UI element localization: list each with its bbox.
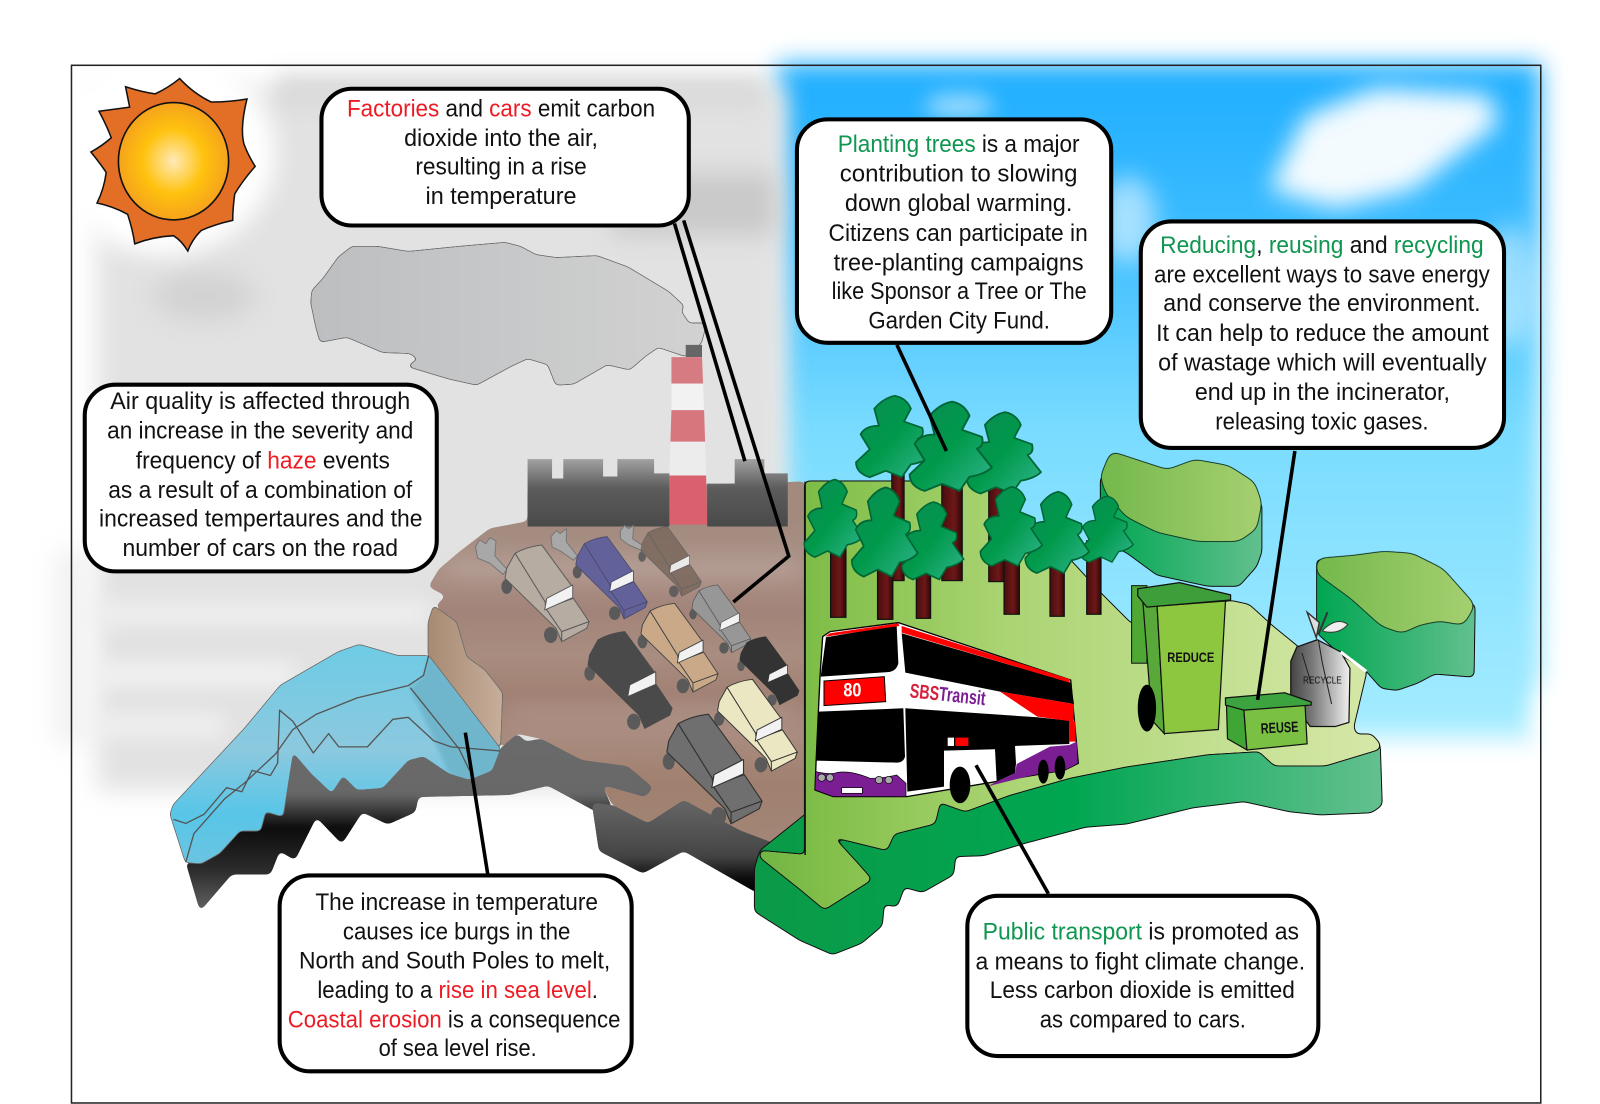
callout: reduce reuse recycle: of wastage which will eventually [1158,349,1487,376]
bush right top [1317,552,1474,633]
callout: sea level rise: The increase in temperature [315,889,598,916]
callout: public transport [967,896,1318,1056]
callout: air quality [85,385,437,571]
icon: sun [91,79,255,251]
reduce label: REDUCE [1167,650,1214,666]
callout: sea level rise: Coastal erosion is a consequence [288,1006,620,1033]
callout: planting trees: tree-planting campaigns [834,249,1084,276]
exhaust smoke puffs [476,525,645,574]
recycle label: RECYCLE [1303,676,1342,687]
callout: sea level rise: causes ice burgs in the [343,919,570,946]
callout: sea level rise [280,875,632,1071]
callout: planting trees: Planting trees is a major [838,131,1080,158]
callout: reduce reuse recycle: It can help to reduce the amount [1156,320,1489,347]
callout: sea level rise: leading to a rise in sea level. [317,977,598,1004]
callout: factories and cars: Factories and cars emit carbon [347,95,655,122]
callout: planting trees: Garden City Fund. [868,308,1050,335]
bush right side [1317,559,1474,690]
dark eroded shoreline right [592,800,805,898]
route number: 80 [843,681,861,702]
callout: planting trees: down global warming. [845,190,1072,217]
icon: recycle bag [1291,612,1366,726]
dark green land edge [755,714,1382,954]
eroded coast [429,606,502,749]
callout: air quality: number of cars on the road [122,535,398,562]
callout: reduce reuse recycle: Reducing, reusing and recycling [1160,232,1484,259]
callout: planting trees: Citizens can participate in [829,220,1088,247]
callout: sea level rise: North and South Poles to melt, [299,947,610,974]
callout: reduce reuse recycle: and conserve the environment. [1163,290,1481,317]
callout: air quality: frequency of haze events [136,447,390,474]
callout: factories and cars: dioxide into the air, [404,125,598,152]
light green land [760,482,1380,909]
cars in traffic [501,527,799,825]
leader lines [465,220,1295,894]
factory building [528,459,788,526]
callout: public transport: a means to fight climate change. [975,948,1305,975]
iceberg body [170,645,500,863]
melting iceberg [170,645,500,863]
callout: factories and cars: in temperature [426,183,577,210]
haze bands over land [449,556,796,722]
callout: reduce reuse recycle: are excellent ways to save energy [1154,262,1490,289]
callout: public transport: as compared to cars. [1040,1006,1246,1033]
reuse label: REUSE [1260,720,1299,738]
icon: reuse box [1225,693,1311,750]
brown polluted land [429,482,805,855]
callout: reduce reuse recycle [1141,221,1504,448]
dark eroded shoreline under ice [186,734,653,911]
tree trunks [831,469,1101,619]
bush left [1101,452,1261,586]
tree crowns [804,396,1133,580]
callout: air quality: Air quality is affected through [110,388,410,415]
smoke cloud from chimney [311,243,706,385]
callout: reduce reuse recycle: end up in the incinerator, [1195,379,1450,406]
callout: public transport: Less carbon dioxide is emitted [990,977,1295,1004]
callout: air quality: increased tempertaures and the [99,505,422,532]
icon: reduce bin [1132,583,1231,734]
factory chimney [669,345,706,475]
callout: air quality: as a result of a combination of [108,477,412,504]
smog haze over polluted side [51,51,786,791]
callout: factories and cars: resulting in a rise [415,153,587,180]
bush left side [1101,476,1261,586]
callout: planting trees [797,119,1111,343]
callout: reduce reuse recycle: releasing toxic gases. [1215,409,1429,436]
bus operator logo: SBSTransit [909,680,987,710]
callout: sea level rise: of sea level rise. [379,1035,537,1062]
bush right [1317,552,1474,690]
callout: public transport: Public transport is promoted as [983,919,1299,946]
callout: factories and cars [321,89,689,225]
callout: air quality: an increase in the severity and [107,418,413,445]
divider between land halves [804,482,806,855]
double decker bus [815,623,1078,803]
bush left top [1101,452,1261,541]
sky with clouds [778,63,1592,760]
callout: planting trees: like Sponsor a Tree or The [832,278,1087,305]
callout: planting trees: contribution to slowing [840,161,1078,188]
